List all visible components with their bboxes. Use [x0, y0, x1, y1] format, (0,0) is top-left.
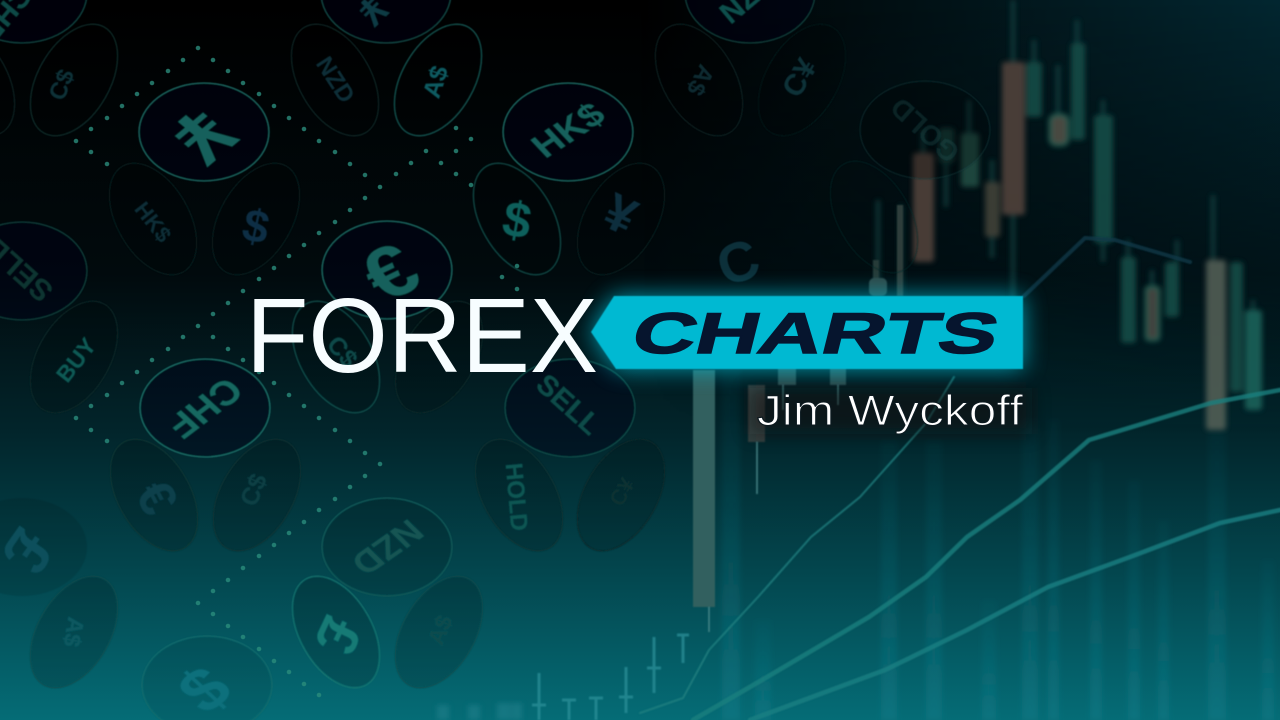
- coin: top left: C$: [44, 65, 81, 104]
- coin: pound left: [0, 498, 136, 703]
- coin: HK dollar: [455, 83, 683, 290]
- small candlesticks at the bottom: [532, 635, 689, 720]
- coin: CHF: CHF: [159, 370, 251, 446]
- coin: CHF: €: [124, 472, 188, 524]
- charts wordmark: CHARTS: [626, 302, 1006, 366]
- coin: euro: [274, 221, 501, 428]
- small blurred bottom bars: [437, 703, 522, 720]
- coin: top right: [637, 0, 864, 151]
- coin: HK dollar: ¥: [595, 183, 645, 247]
- coin: sell right: SELL: [530, 368, 606, 442]
- coin: NZD: £: [302, 608, 374, 664]
- charts banner: [591, 296, 1023, 369]
- coin: sell right: C¥: [604, 473, 640, 510]
- currency coins: [0, 0, 990, 720]
- lower trend line: [750, 510, 1280, 720]
- coin: sell right: HOLD: [500, 462, 532, 532]
- middle trend line: [693, 390, 1280, 720]
- coin: NZD: [274, 498, 501, 703]
- coin: top middle: [273, 0, 500, 151]
- candle bodies green: [939, 43, 1262, 410]
- coin: pound left: A$: [59, 615, 89, 649]
- wicks: [878, 0, 1253, 310]
- coin: yen: ¥: [152, 93, 254, 179]
- coin: euro: €: [345, 227, 435, 317]
- candlestick chart: [878, 0, 1262, 430]
- coin: CHF: C$: [235, 470, 273, 510]
- coin: HK dollar: HK$: [523, 95, 613, 165]
- faded top of thin trend line: [1024, 238, 1190, 296]
- coin: faint C symbol: C: [708, 225, 768, 299]
- coin: HK dollar: $: [498, 190, 536, 250]
- banner glow: [591, 296, 1023, 369]
- coin: dollar bottom: [142, 636, 272, 720]
- coin: gold: [812, 81, 990, 288]
- coin: yen: [91, 83, 318, 290]
- coin: NZD: A$: [422, 611, 458, 649]
- thin trend line: [640, 377, 954, 713]
- candles near the banner: [693, 205, 903, 632]
- dotted lattice: [76, 48, 517, 695]
- coin: sell left: [0, 222, 136, 428]
- author name shadow: [750, 388, 1032, 434]
- coin: yen: $: [238, 198, 274, 254]
- coin: CHF: [92, 359, 319, 566]
- candle bodies brown: [913, 62, 1226, 430]
- coin: euro: C$: [321, 331, 363, 373]
- title: forex: FOREX: [246, 277, 598, 395]
- background volume columns: [722, 365, 1274, 720]
- coin: top right: C¥: [776, 53, 824, 103]
- coin: sell left: BUY: [51, 333, 101, 387]
- coin: yen: HK$: [130, 197, 176, 247]
- coin: top left: [0, 0, 136, 151]
- coin: NZD: NZD: [343, 512, 431, 582]
- coin: top middle: NZD: [310, 52, 360, 108]
- coin: gold: GOLD: [885, 91, 965, 169]
- coin: sell right: [457, 359, 683, 566]
- trend lines: [640, 238, 1280, 720]
- coin: top right: A$: [681, 60, 719, 100]
- author name: Jim Wyckoff: [757, 387, 1024, 435]
- coin: top middle: A$: [418, 62, 454, 102]
